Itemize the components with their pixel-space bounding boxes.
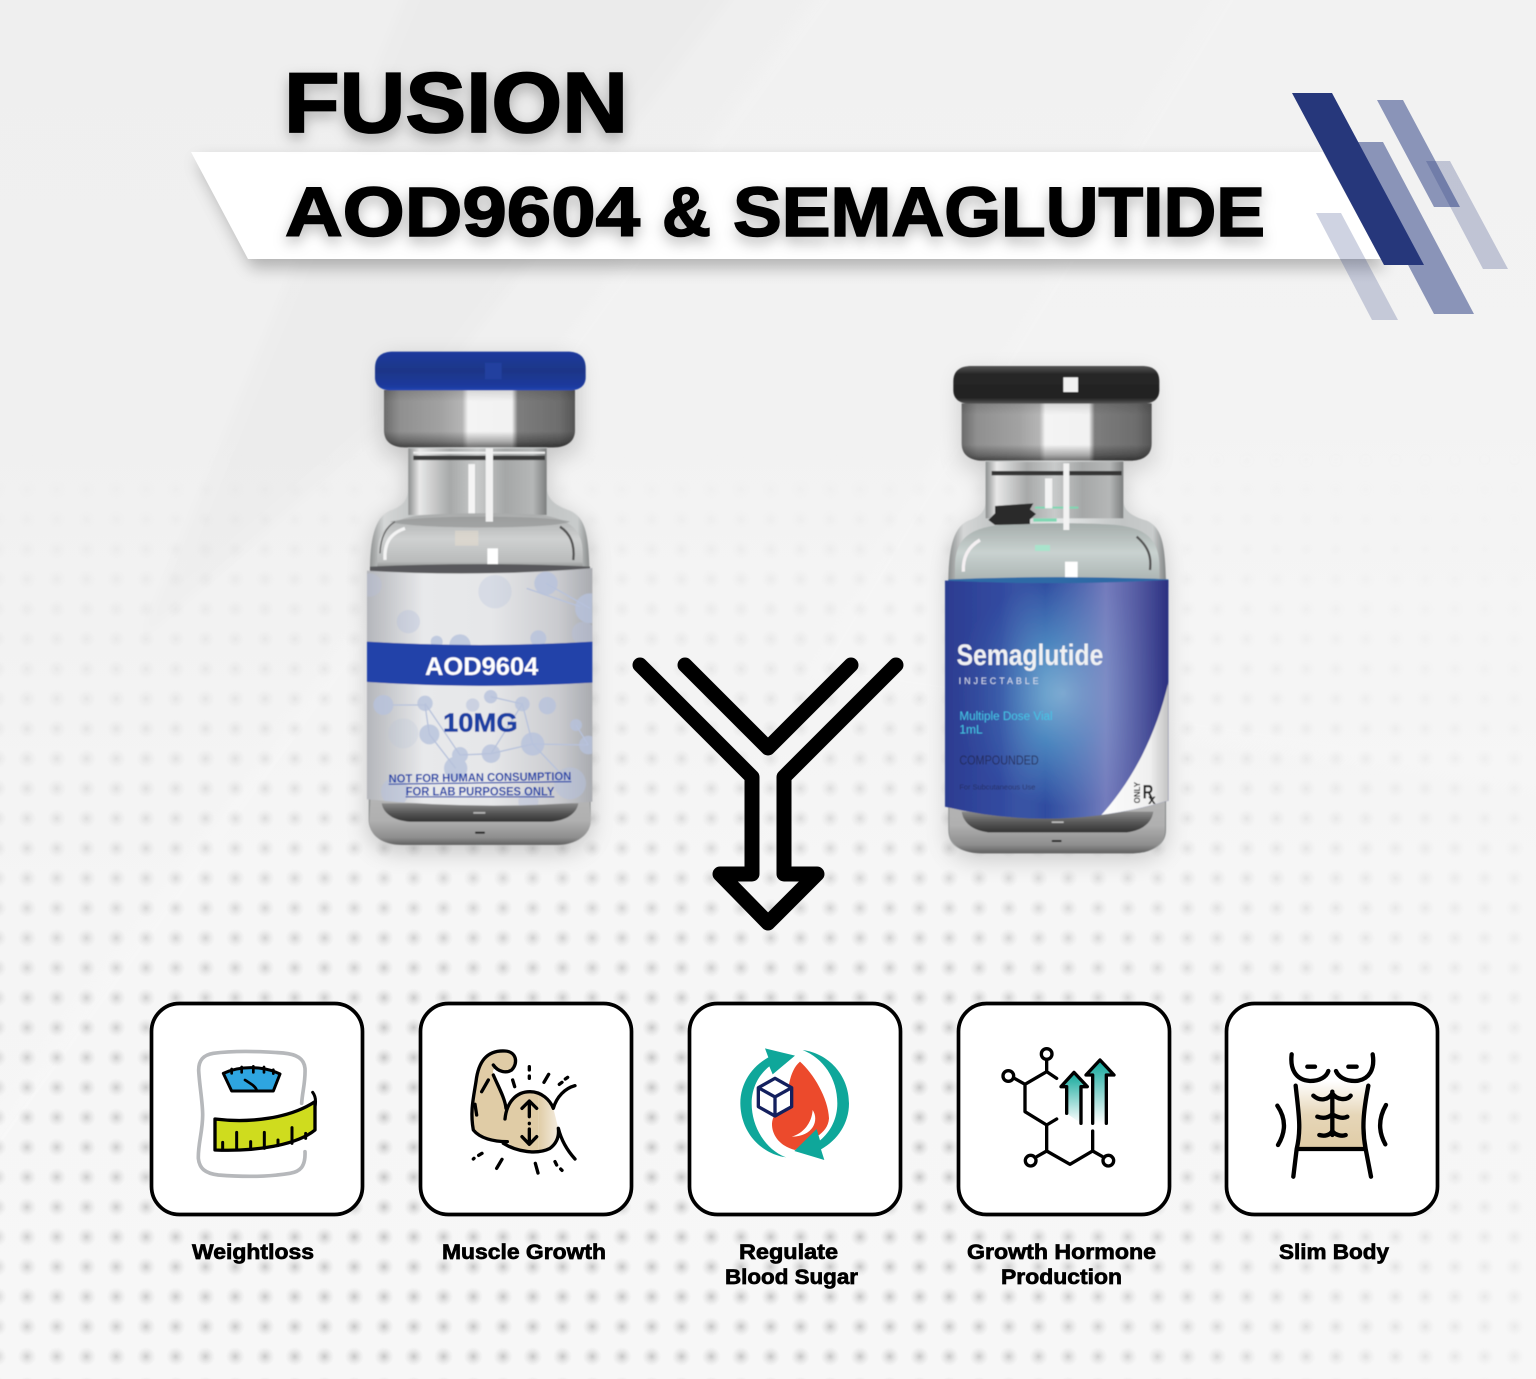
vial: Semaglutide: INJECTABLE [959, 676, 1039, 686]
ribbon banner [191, 152, 1386, 268]
icon: molecule and rising arrows [1003, 1049, 1114, 1166]
card [152, 1004, 362, 1214]
icon: toned torso [1277, 1054, 1386, 1177]
card [958, 1004, 1170, 1214]
subtitle: AOD9604 & SEMAGLUTIDE [285, 173, 1265, 251]
panel: Regulate Blood Sugar [690, 1004, 900, 1289]
subtitle: AOD9604 & SEMAGLUTIDE: & [662, 173, 711, 251]
vial: Semaglutide: Semaglutide [957, 639, 1103, 672]
card [420, 1004, 632, 1214]
label: Muscle Growth [442, 1241, 606, 1264]
vial: Semaglutide: Multiple Dose Vial [959, 709, 1053, 723]
title: FUSION: FUSION [284, 56, 628, 151]
background [0, 486, 1515, 1363]
panel: Muscle Growth [420, 1004, 632, 1264]
label: Slim Body [1279, 1241, 1389, 1264]
vial: Semaglutide: ONLY [1133, 781, 1142, 803]
vial: AOD9604 [358, 352, 605, 852]
label [725, 1241, 858, 1289]
vial: Semaglutide: R [1143, 782, 1153, 803]
label [967, 1241, 1156, 1289]
icon: blood drop, sugar cube and cycle arrows [740, 1048, 849, 1160]
vial: Semaglutide: x [1148, 791, 1156, 807]
vial: Semaglutide [945, 366, 1173, 860]
card [1226, 1004, 1438, 1214]
vial: AOD9604: 10MG [443, 707, 518, 737]
label: Growth Hormone [967, 1241, 1156, 1264]
icon: scale and measuring tape [198, 1052, 316, 1176]
label: Production [1001, 1266, 1122, 1289]
label: Regulate [739, 1241, 838, 1264]
vial: AOD9604: FOR LAB PURPOSES ONLY [406, 785, 555, 798]
decorative blue slanted bars [1292, 93, 1508, 320]
panel: Growth Hormone Production [958, 1004, 1170, 1289]
arrow: two streams merging into one [640, 665, 896, 923]
panel: Slim Body [1226, 1004, 1438, 1264]
vial: Semaglutide: For Subcutaneous Use [959, 782, 1035, 791]
vial: Semaglutide: COMPOUNDED [959, 752, 1039, 767]
panel: Weightloss [152, 1004, 362, 1264]
icon: flexed arm [472, 1051, 575, 1173]
vial: Semaglutide: 1mL [959, 722, 983, 736]
subtitle: AOD9604 & SEMAGLUTIDE: AOD9604 [285, 173, 640, 251]
label: Blood Sugar [725, 1266, 858, 1289]
subtitle: AOD9604 & SEMAGLUTIDE: SEMAGLUTIDE [733, 173, 1265, 251]
label: Weightloss [192, 1241, 314, 1264]
card [690, 1004, 900, 1214]
vial: AOD9604: NOT FOR HUMAN CONSUMPTION [389, 770, 571, 786]
vial: AOD9604: AOD9604 [425, 653, 538, 681]
